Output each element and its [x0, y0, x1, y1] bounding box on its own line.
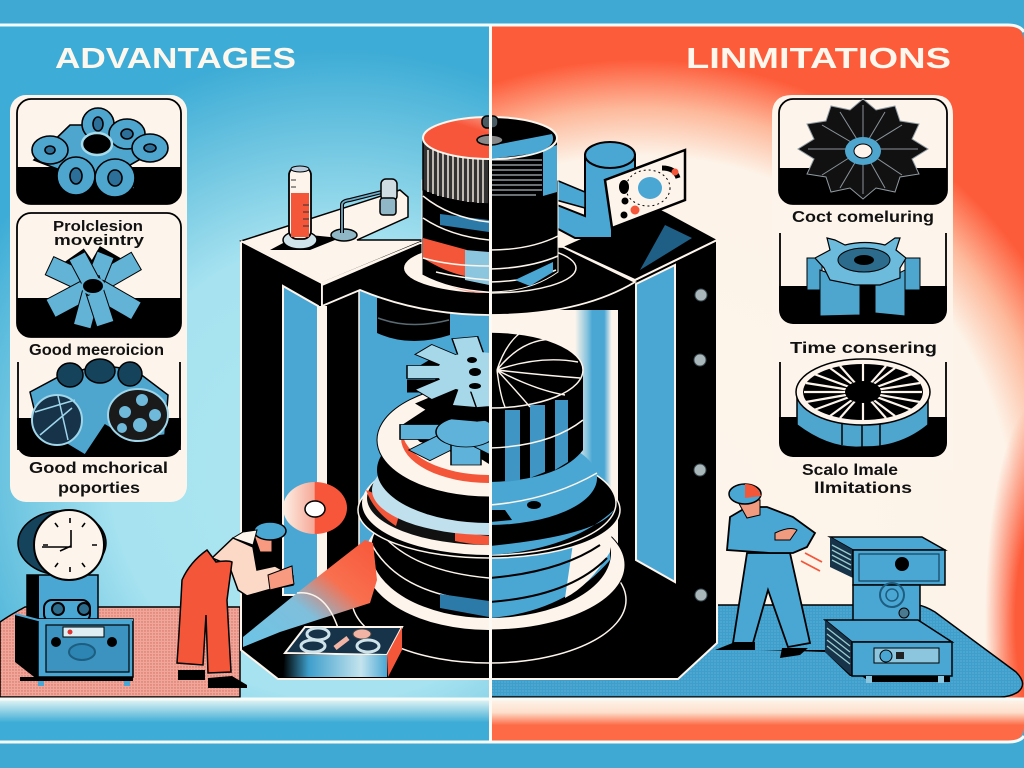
- interior left: [359, 290, 490, 570]
- upper cylinder left half: [422, 180, 490, 292]
- central gear: [399, 336, 489, 466]
- panel: advantages background: [0, 26, 489, 741]
- tile: lattice parts: [17, 359, 181, 457]
- panel: advantages card: [10, 95, 187, 502]
- panel: limitations card: [772, 95, 953, 497]
- upper cylinder right half: [490, 180, 558, 292]
- clock and console: [15, 510, 133, 686]
- machine frame: [241, 240, 717, 679]
- heading: advantages: ADVANTAGES: [55, 43, 296, 75]
- icon: clock: [18, 510, 106, 580]
- label: scale limitations: Scalo lmale: [802, 462, 898, 479]
- piston under band: [377, 298, 450, 341]
- label: good mechanical properties: [29, 460, 168, 497]
- console back box: [27, 575, 98, 619]
- interior right: [490, 310, 577, 550]
- knob: [477, 116, 503, 145]
- tile: wheel: [779, 359, 947, 457]
- right side blue panel: [636, 265, 675, 582]
- base stack left half: [352, 394, 489, 664]
- display screen: [605, 150, 685, 228]
- ribbed head right: [492, 116, 558, 196]
- middle section: [853, 585, 920, 626]
- shadow: [760, 650, 950, 682]
- face and cap: [737, 500, 760, 518]
- left side blue panel: [283, 286, 318, 595]
- jacket: [727, 507, 815, 553]
- floor underline: [0, 698, 1024, 700]
- label: precision: Prolclesion: [53, 218, 143, 235]
- centre divider: [489, 25, 492, 743]
- chute: [243, 540, 377, 647]
- console base: [15, 614, 38, 680]
- right side bolts: [694, 289, 707, 601]
- overalls: [177, 550, 232, 673]
- spark lines: [801, 553, 822, 571]
- press machine: [241, 116, 717, 679]
- shadow under thermometer: [270, 234, 340, 250]
- base: [825, 620, 952, 642]
- label: time consuming: Time consering: [790, 340, 937, 357]
- floor: advantages side: [0, 607, 240, 697]
- top plate: [241, 190, 425, 283]
- shadow and boots: [715, 642, 808, 658]
- hands: [268, 566, 294, 590]
- arms and torso: [212, 538, 293, 596]
- label: precision: moveintry: [54, 232, 145, 249]
- label: cost consuming: Coct comeluring: [792, 209, 934, 226]
- label: precision: [17, 213, 181, 337]
- base stack right half: [492, 332, 627, 664]
- label: good mechanical properties: poporties: [58, 480, 140, 497]
- parts tray: [283, 627, 402, 677]
- worker: right, in blue coveralls: [715, 484, 822, 658]
- label: good precision: Good meeroicion: [29, 342, 164, 359]
- upper box: [830, 537, 945, 550]
- icon: half orange disk: [283, 482, 347, 534]
- gauge arm and cylinder: [545, 142, 717, 280]
- machine: right console: [760, 537, 952, 683]
- head and cap: [253, 532, 272, 552]
- label: good mechanical properties: Good mchorical: [29, 460, 168, 477]
- heading: limitations: LINMITATIONS: [686, 43, 951, 75]
- legs: [733, 553, 810, 647]
- ribbed head left: [422, 116, 489, 204]
- label: scale limitations: llmitations: [814, 480, 912, 497]
- worker: left, in orange overalls: [177, 522, 294, 688]
- label: scale limitations: [802, 462, 912, 497]
- floor: limitations side: [491, 605, 1023, 697]
- pipe and valve: [331, 179, 397, 241]
- tile: precision gear: [17, 99, 181, 204]
- shoes: [178, 670, 247, 688]
- thermometer: [283, 166, 317, 249]
- panel: limitations background: [491, 26, 1024, 741]
- tile: blue gear: [779, 233, 947, 324]
- tile: cost gear: [779, 99, 947, 204]
- black band under top: [322, 243, 635, 315]
- collar: [404, 252, 577, 294]
